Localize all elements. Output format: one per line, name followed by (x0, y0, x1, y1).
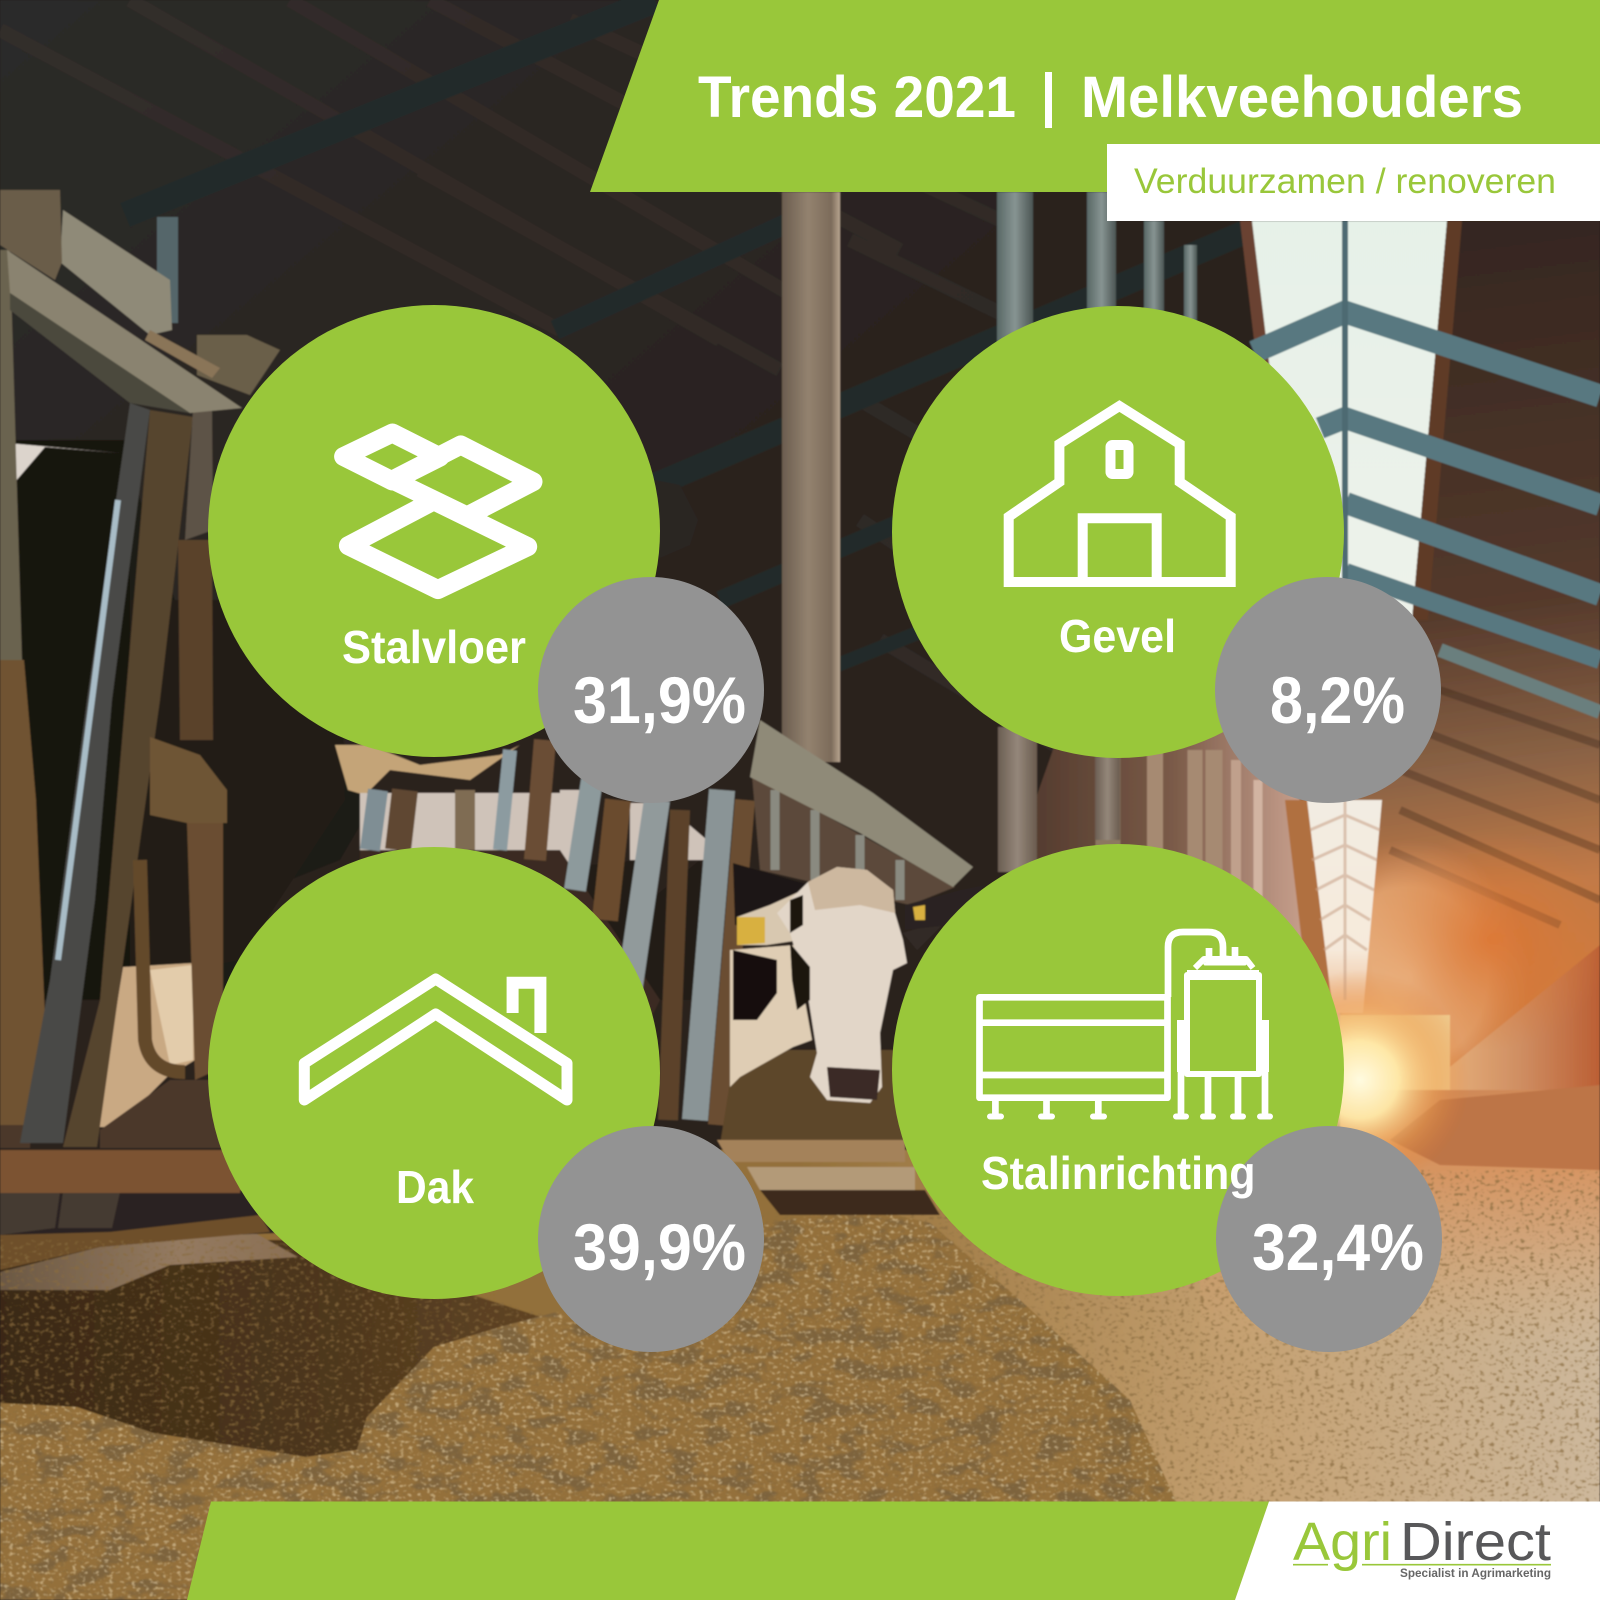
shadow under rail (0, 1190, 300, 1262)
green circle (208, 305, 660, 757)
label: Stalinrichting (981, 1147, 1256, 1199)
value: 39,9% (573, 1210, 746, 1284)
value: 32,4% (1252, 1210, 1424, 1284)
link bar (145, 330, 220, 378)
stanchion far rust post (0, 660, 47, 1125)
U-bar (140, 860, 185, 1072)
value: 8,2% (1270, 663, 1405, 737)
steel pillars (997, 192, 1197, 872)
panel: Stalvloer (208, 305, 764, 803)
logo underline (1293, 1564, 1551, 1566)
lower skylight stripes (1310, 800, 1380, 1000)
barn ceiling (0, 0, 1600, 1280)
green circle (208, 847, 660, 1299)
hay strip on curb (0, 1215, 270, 1270)
subtitle: Verduurzamen / renoveren (1134, 162, 1556, 201)
panel: Gevel (892, 306, 1441, 803)
left ceiling edge of skylight (1240, 221, 1300, 560)
panel: Stalinrichting (892, 844, 1442, 1352)
clamp (150, 737, 227, 823)
stanchion steel post (20, 403, 150, 1143)
title: Trends 2021 (698, 65, 1016, 130)
top rail (7, 250, 242, 413)
logo wordmark Direct: Direct (1400, 1512, 1551, 1572)
dark cow body left (8, 445, 375, 1000)
right roof (1290, 221, 1600, 1085)
muzzle (827, 1067, 880, 1100)
lower post (187, 823, 223, 1080)
white cow backs behind barrier (360, 790, 707, 867)
bottom rail (717, 1140, 905, 1162)
hay fine speckle dark (0, 1170, 1600, 1502)
value: 31,9% (573, 663, 746, 737)
icon: floor tiles (344, 433, 533, 590)
skylight right edge (1412, 221, 1462, 620)
lock plate (60, 210, 172, 335)
grey value circle (538, 577, 764, 803)
right ear (903, 920, 947, 950)
subtitle box (1107, 144, 1600, 221)
far end glow (1250, 970, 1470, 1190)
barrier inner bars (752, 775, 955, 905)
skylight steel trusses (1254, 221, 1600, 712)
title (698, 65, 1523, 130)
barrier vertical bars (370, 740, 745, 1125)
green circle (892, 844, 1344, 1296)
green footer band (187, 1502, 1269, 1600)
cow ear (655, 480, 698, 558)
label: Gevel (1059, 610, 1176, 662)
far floor band (1340, 1090, 1600, 1170)
back post behind stanchion (157, 217, 178, 323)
green header banner (590, 0, 1600, 192)
rail legs (0, 1192, 120, 1235)
lower cow body dark (360, 850, 660, 1080)
head top tone (808, 867, 895, 913)
cow white patch (7, 443, 120, 482)
logo: AgriDirect (1293, 1512, 1551, 1580)
cow snout (335, 745, 520, 795)
cow udder (97, 963, 195, 1127)
under-udder shade (0, 1067, 225, 1148)
icon: milk tank and cooling unit (980, 932, 1270, 1116)
icon: roof with chimney (304, 979, 567, 1100)
concrete curb (0, 1233, 298, 1290)
steel highlight (58, 500, 118, 960)
feed slab (0, 1240, 560, 1457)
orange haze (1370, 830, 1600, 1050)
grey value circle (538, 1126, 764, 1352)
ceiling purlins (0, 0, 1220, 760)
road orange reflection (1200, 1130, 1600, 1350)
distant cows (1390, 1085, 1600, 1170)
label: Stalvloer (342, 621, 526, 673)
hay fine speckle light (0, 1200, 1200, 1600)
hay on manger edge (747, 1167, 915, 1190)
rust post (178, 540, 213, 740)
far end yellow wall (1340, 1015, 1450, 1100)
second post top (185, 410, 213, 540)
bracket left (0, 190, 62, 280)
stanchion dark post (63, 410, 193, 1147)
lower skylight (1307, 800, 1382, 1013)
label: Dak (396, 1161, 474, 1213)
far barn wall right (1440, 945, 1600, 1130)
panel: Dak (208, 847, 764, 1352)
back wall (1000, 730, 1345, 1040)
peach haze beside skylight (1290, 840, 1530, 1110)
rusty main pillar (782, 192, 840, 762)
hay pile base (0, 1200, 1200, 1600)
roof planks (1390, 690, 1600, 925)
title: Melkveehouders (1081, 65, 1523, 130)
grey value circle (1215, 577, 1441, 803)
black patch (733, 950, 777, 1020)
cow neck and body (730, 863, 985, 1103)
green circle (892, 306, 1344, 758)
cow ear cream (737, 890, 803, 945)
far left post upper (0, 250, 22, 660)
barrier top rail and plates (750, 720, 973, 887)
icon: barn (1009, 406, 1231, 582)
back wall posts (1108, 740, 1258, 980)
logo wordmark Agri: Agri (1293, 1512, 1392, 1572)
white logo panel (1235, 1502, 1600, 1600)
grey value circle (1216, 1126, 1442, 1352)
ceiling cross beams (125, 0, 1250, 680)
cow head (777, 867, 907, 1103)
bracket right (197, 335, 280, 395)
body white (730, 945, 812, 1087)
floor base (0, 1150, 1600, 1600)
black cow patches behind barrier (560, 860, 720, 1000)
eye patches (790, 943, 810, 1010)
barrier dark lower shadow (720, 1050, 905, 1145)
skylight upper (1252, 221, 1447, 620)
far cow (905, 885, 985, 930)
orange lower roof strip (1285, 800, 1340, 1010)
logo tagline: Specialist in Agrimarketing (1400, 1566, 1551, 1580)
bottom horizontal bar (0, 1150, 240, 1193)
